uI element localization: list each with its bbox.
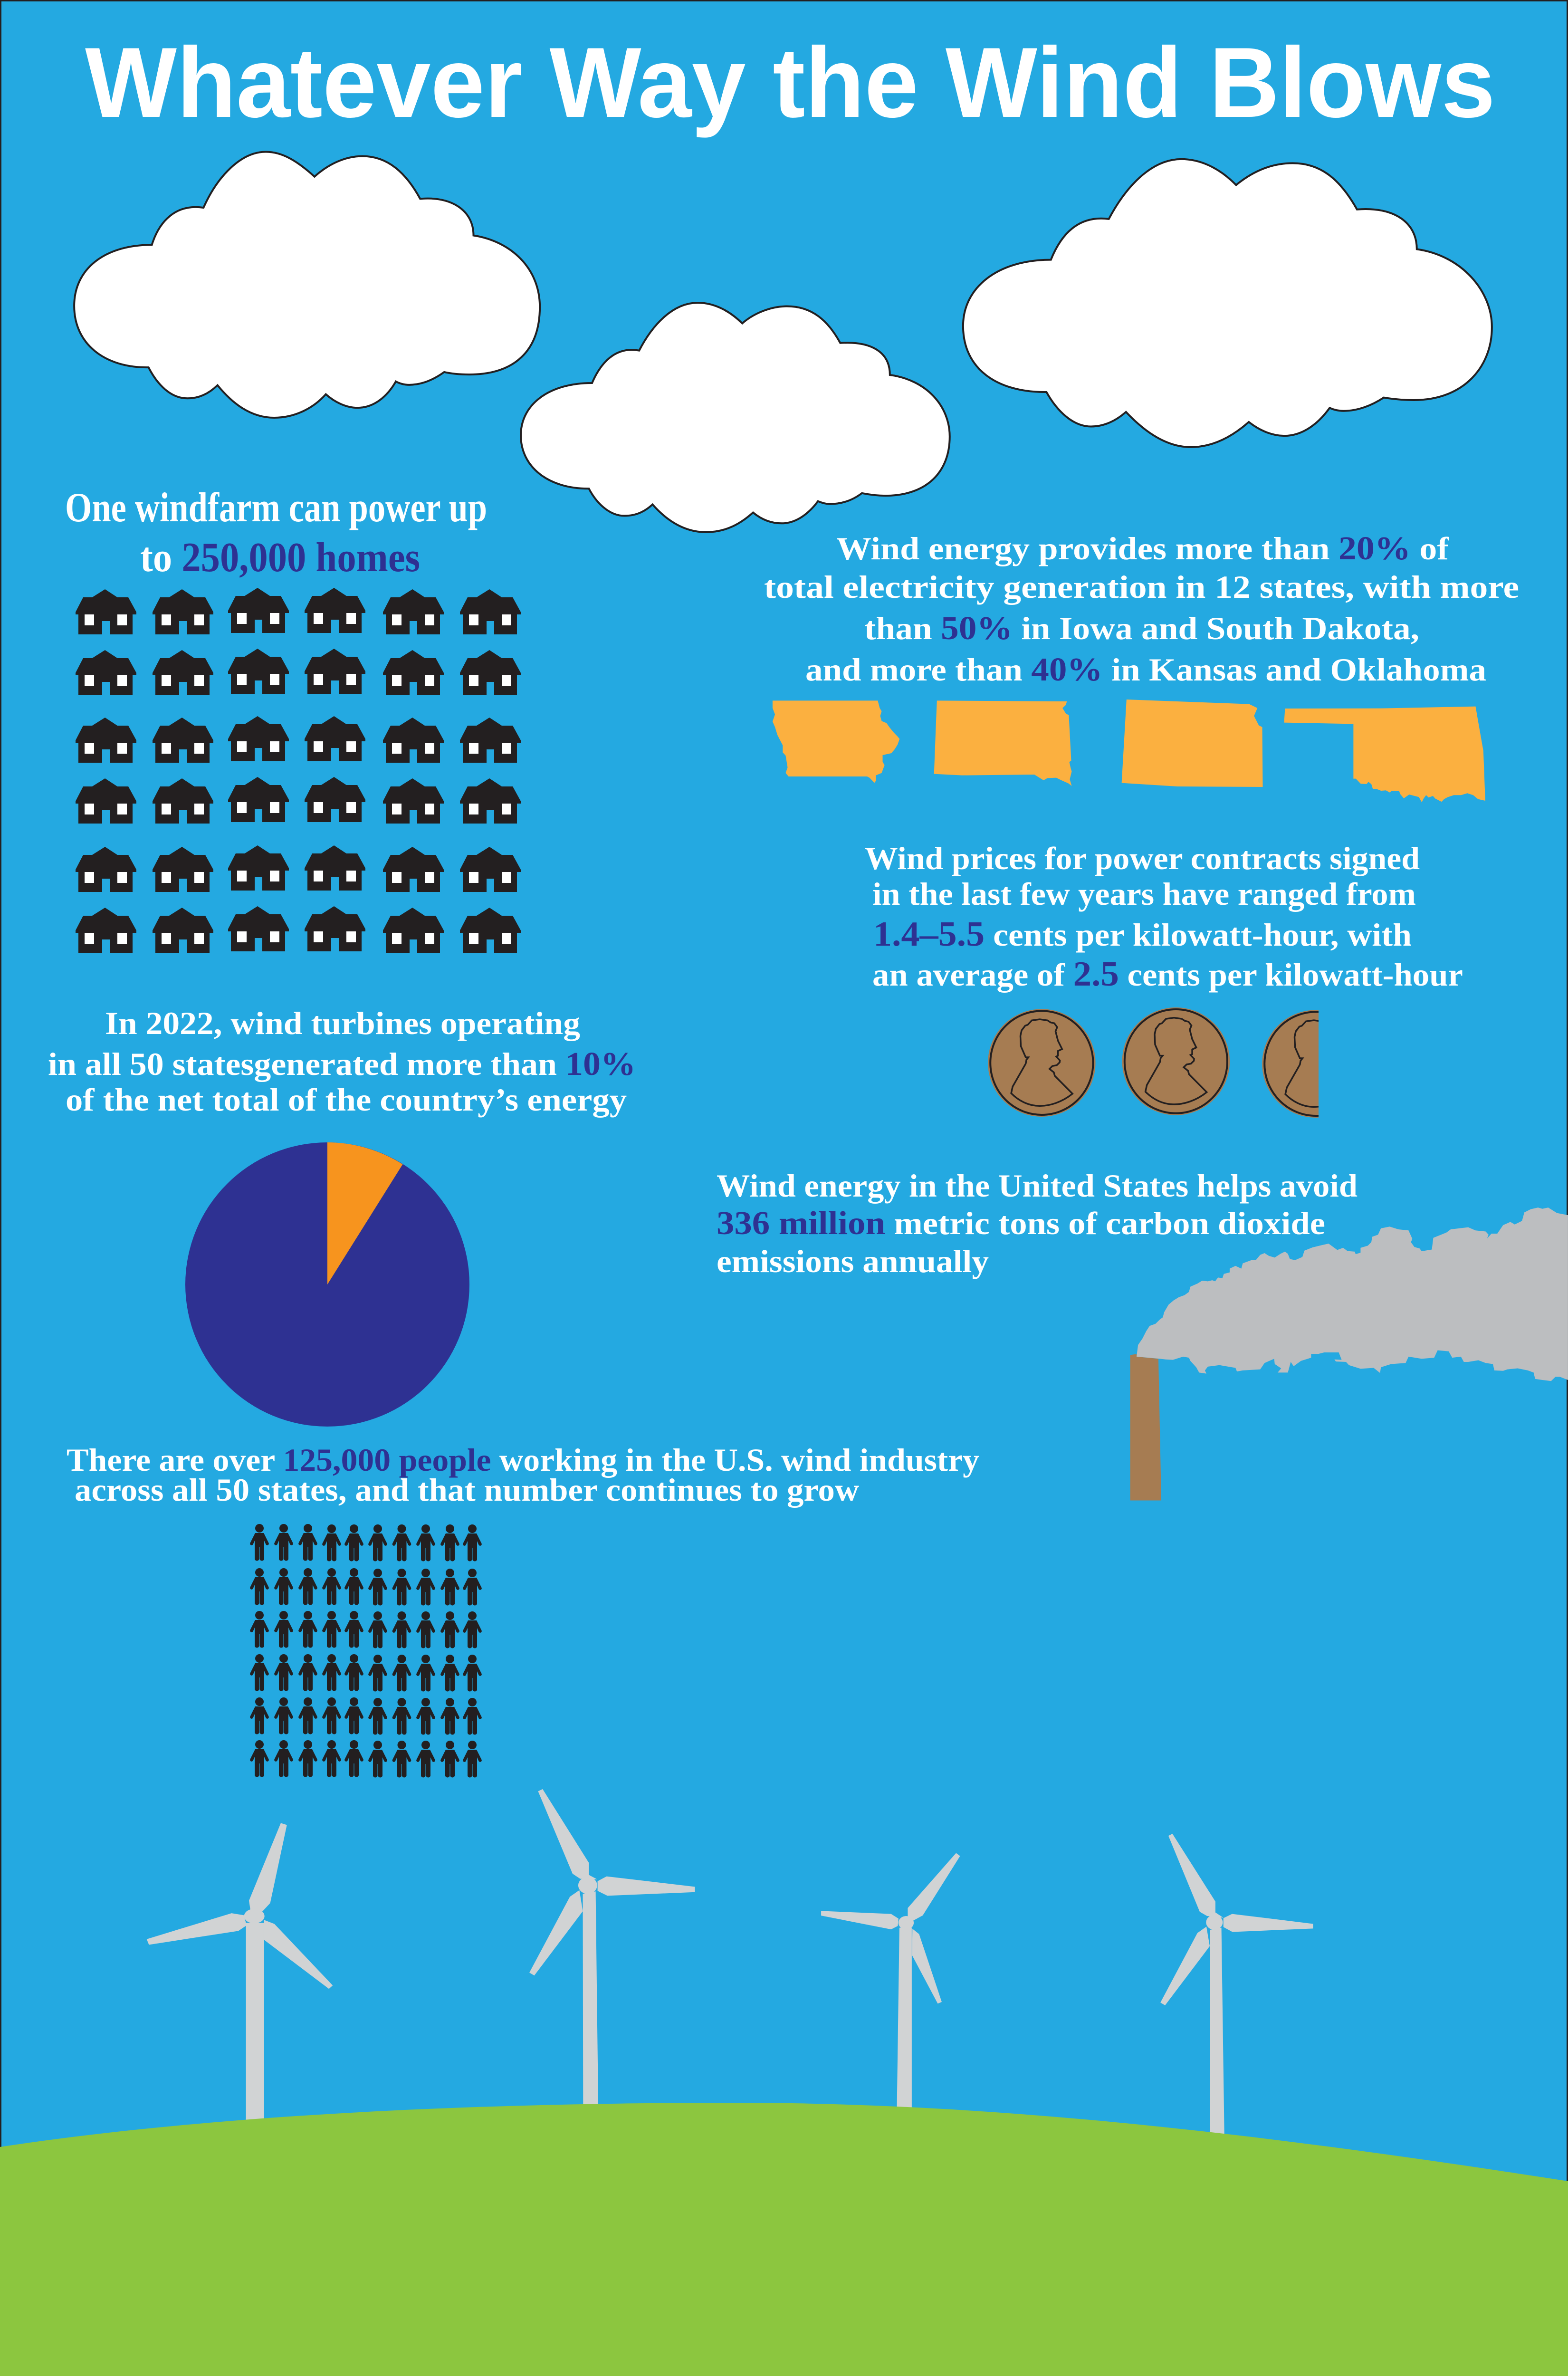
text: wind prices: in the last few years have ranged from <box>872 876 1416 912</box>
wind turbine 2 <box>529 1789 695 2112</box>
text: homes powered: to 250,000 homes <box>140 535 420 581</box>
text: net total share: of the net total of the country’s energy <box>66 1082 627 1118</box>
text: wind prices: 1.4–5.5 cents per kilowatt-hour, with <box>873 915 1412 954</box>
icon: chimney <box>1130 1354 1161 1501</box>
icon: cloud right <box>963 159 1492 447</box>
map: Oklahoma <box>1284 707 1485 802</box>
icon: pennies <box>988 1007 1319 1118</box>
wind turbine 4 <box>1160 1834 1313 2140</box>
text: homes powered: One windfarm can power up <box>65 485 487 531</box>
text: net total share: in all 50 statesgenerated more than 10% <box>48 1046 636 1083</box>
text: state electricity share: and more than 40% in Kansas and Oklahoma <box>805 651 1486 688</box>
icon grid: houses <box>76 588 521 953</box>
text: state electricity share: Wind energy provides more than 20% of <box>836 530 1449 567</box>
map: Iowa <box>773 700 899 783</box>
text: wind prices: an average of 2.5 cents per kilowatt-hour <box>872 955 1463 994</box>
text: jobs: There are over 125,000 people working in the U.S. wind industry <box>67 1442 979 1478</box>
state maps <box>773 699 1485 802</box>
text: wind prices: Wind prices for power contracts signed <box>865 840 1420 876</box>
title: Whatever Way the Wind Blows <box>85 27 1495 138</box>
green hill <box>0 2103 1568 2376</box>
icon grid: people <box>250 1524 482 1777</box>
icon: cloud middle <box>521 303 950 532</box>
wind turbine 3 <box>821 1853 960 2117</box>
map: Kansas <box>1122 699 1263 787</box>
icon: cloud left <box>74 152 540 418</box>
text: carbon avoided: Wind energy in the United States helps avoid <box>717 1168 1358 1204</box>
map: South Dakota <box>934 700 1072 786</box>
text: state electricity share: total electricity generation in 12 states, with more <box>764 569 1519 605</box>
text: net total share <box>48 1005 636 1118</box>
text: state electricity share: than 50% in Iowa and South Dakota, <box>864 610 1419 647</box>
smokestack with smoke <box>1130 1207 1568 1501</box>
pie chart <box>185 1142 469 1427</box>
text: carbon avoided <box>717 1168 1358 1279</box>
text: state electricity share <box>764 530 1519 688</box>
text: wind prices <box>865 840 1463 994</box>
text: carbon avoided: 336 million metric tons of carbon dioxide <box>717 1205 1325 1242</box>
text: carbon avoided: emissions annually <box>717 1243 989 1279</box>
text: net total share: In 2022, wind turbines operating <box>105 1005 580 1041</box>
text: jobs <box>67 1442 979 1508</box>
icon: smoke <box>1137 1207 1568 1381</box>
wind turbine 1 <box>147 1823 333 2129</box>
text: homes powered <box>65 485 487 581</box>
text: jobs: across all 50 states, and that number continues to grow <box>75 1472 859 1508</box>
